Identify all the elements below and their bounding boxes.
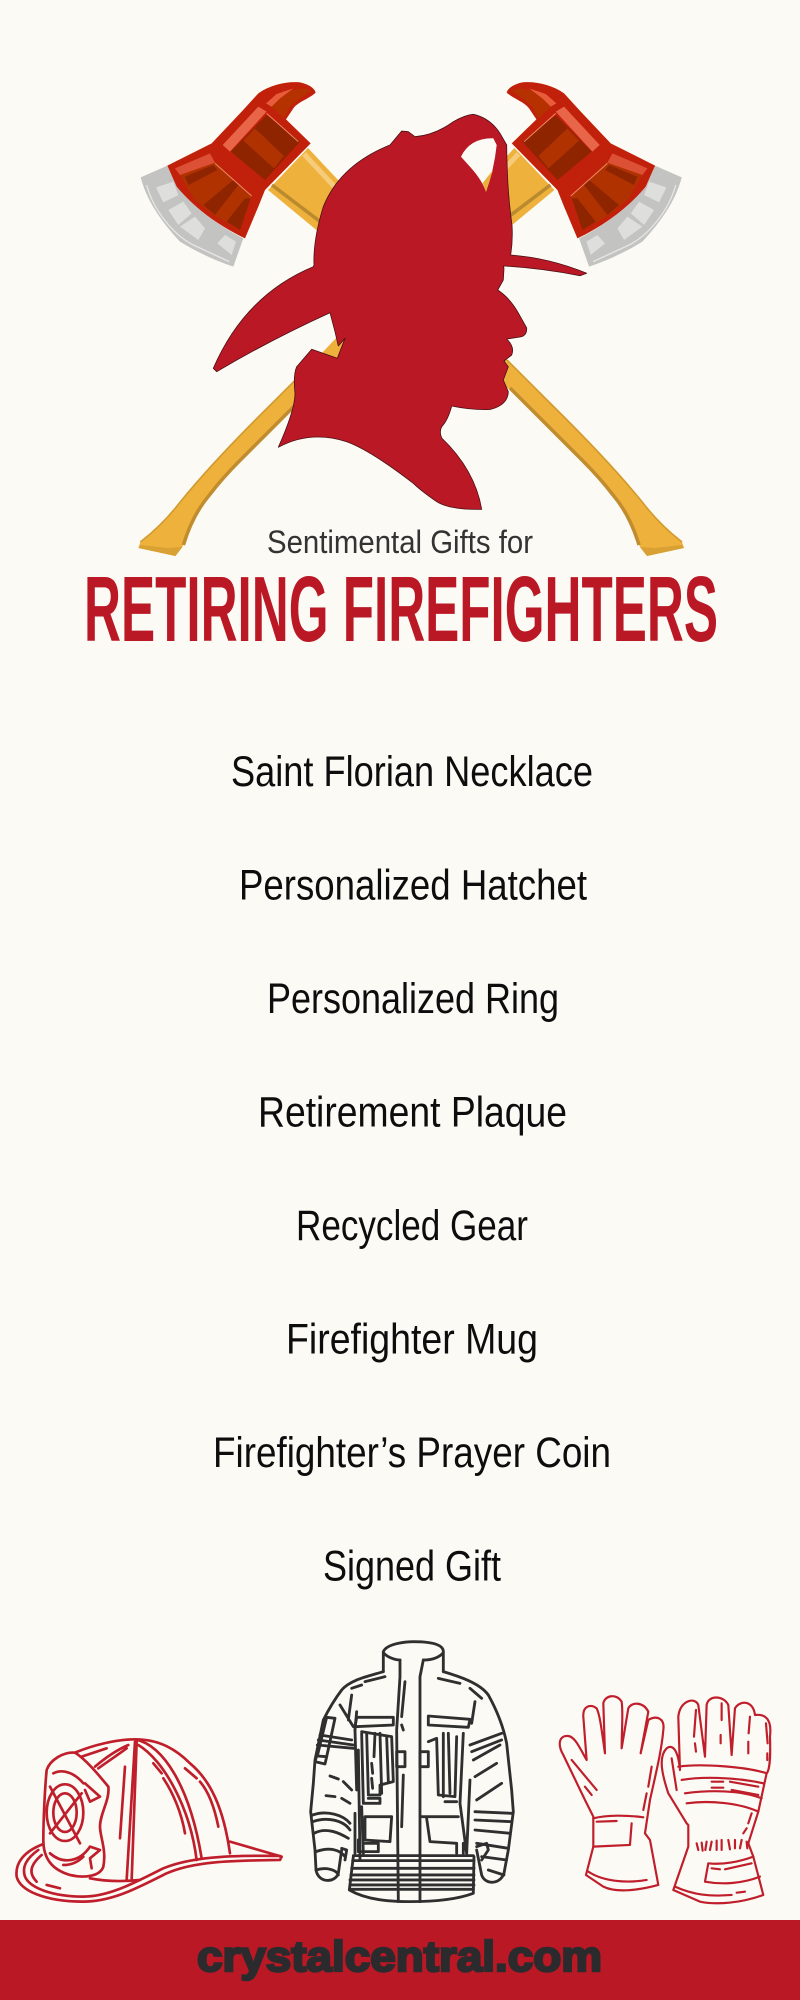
left axe (141, 82, 684, 556)
gift 2: Personalized Hatchet (239, 862, 587, 910)
icon: turnout jacket (311, 1642, 513, 1902)
website address: crystalcentral.com (197, 1933, 602, 1981)
gift 7: Firefighter’s Prayer Coin (213, 1429, 611, 1477)
footer band (0, 1920, 800, 2000)
hero illustration: crossed axes and firefighter silhouette (138, 82, 684, 556)
right axe (138, 82, 682, 556)
firefighter silhouette (213, 114, 587, 509)
handle seen through visor gap (483, 170, 493, 192)
icon: firefighter helmet (16, 1739, 282, 1902)
gift 8: Signed Gift (323, 1542, 501, 1590)
gift 4: Retirement Plaque (258, 1088, 567, 1136)
gift 3: Personalized Ring (267, 975, 559, 1023)
gift 5: Recycled Gear (296, 1202, 528, 1250)
gift 1: Saint Florian Necklace (231, 748, 593, 796)
gift list (213, 748, 611, 1590)
visor gap (461, 138, 497, 192)
subtitle: Sentimental Gifts for (267, 524, 533, 560)
gift 6: Firefighter Mug (286, 1316, 538, 1364)
icon: firefighter gloves (560, 1696, 770, 1903)
